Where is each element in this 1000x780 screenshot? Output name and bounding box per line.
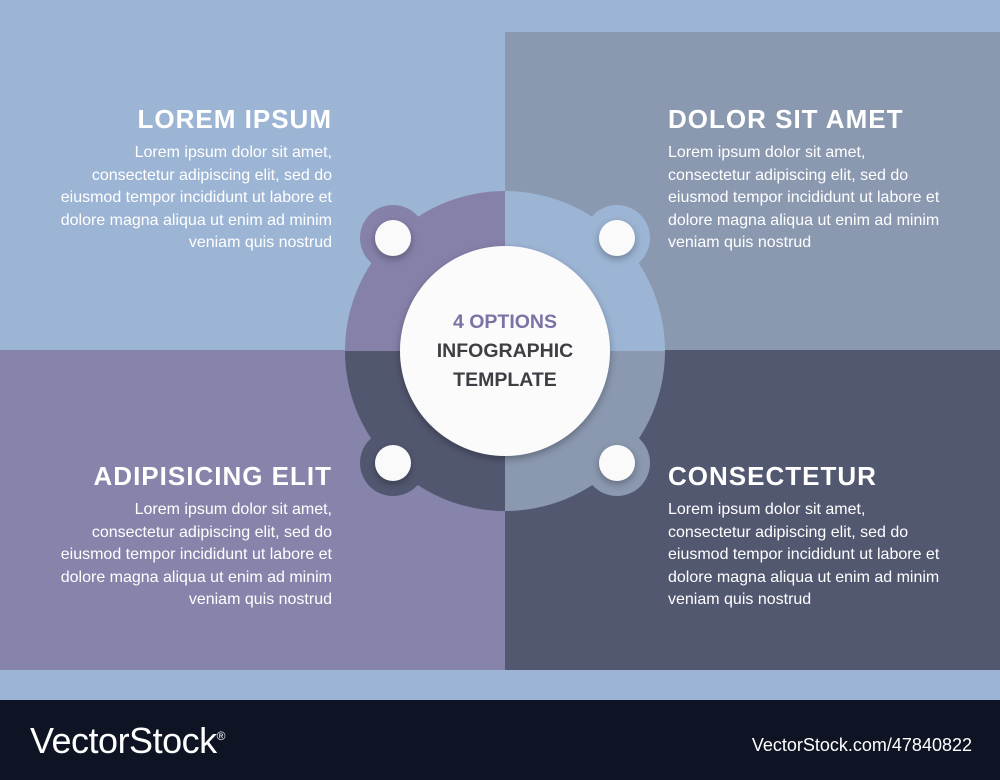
text: top-right: veniam quis nostrud [668, 234, 811, 251]
text: top-right: DOLOR SIT AMET [668, 104, 903, 134]
text: top-left: consectetur adipiscing elit, sed do [92, 166, 332, 184]
text: top-left: eiusmod tempor incididunt ut labore et [61, 189, 332, 206]
center circle: 4 OPTIONS [453, 311, 557, 333]
footer: VectorStock® [30, 720, 225, 761]
icon: dots [375, 220, 635, 481]
center circle: INFOGRAPHIC [437, 340, 573, 362]
footer [0, 700, 1000, 780]
text: top-left [61, 104, 332, 251]
text: bottom-left: Lorem ipsum dolor sit amet, [135, 501, 332, 518]
footer: VectorStock.com/47840822 [752, 735, 972, 755]
text: bottom-right: Lorem ipsum dolor sit amet, [668, 501, 865, 518]
panel: top-left [0, 0, 505, 350]
text: bottom-left: ADIPISICING ELIT [94, 461, 332, 491]
center circle [400, 246, 610, 456]
text: bottom-right: consectetur adipiscing elit, sed do [668, 524, 908, 540]
panel: top-right [505, 32, 1000, 350]
text: bottom-right: eiusmod tempor incididunt ut labore et [668, 546, 939, 563]
text: bottom-left: dolore magna aliqua ut enim ad minim [61, 568, 332, 586]
text: bottom-left: veniam quis nostrud [189, 591, 332, 608]
text: top-right: Lorem ipsum dolor sit amet, [668, 144, 865, 161]
text: top-left: Lorem ipsum dolor sit amet, [135, 144, 332, 161]
text: bottom-left: consectetur adipiscing elit, sed do [92, 524, 332, 540]
text: top-right: eiusmod tempor incididunt ut labore et [668, 189, 939, 206]
text: top-left: veniam quis nostrud [189, 234, 332, 251]
panel: bottom-left [0, 350, 505, 670]
text: bottom-left: eiusmod tempor incididunt ut labore et [61, 546, 332, 563]
text: top-right: dolore magna aliqua ut enim ad minim [668, 212, 939, 228]
text: top-right [668, 104, 940, 251]
text: top-left: dolore magna aliqua ut enim ad minim [61, 212, 332, 228]
text: bottom-left [61, 461, 332, 608]
panel: bottom-right [505, 350, 1000, 670]
text: bottom-right: veniam quis nostrud [668, 591, 811, 608]
text: top-right: consectetur adipiscing elit, sed do [668, 166, 908, 184]
center circle: TEMPLATE [453, 369, 557, 391]
text: top-left: LOREM IPSUM [138, 104, 332, 134]
text: bottom-right [668, 461, 940, 608]
text: bottom-right: dolore magna aliqua ut enim ad minim [668, 568, 939, 586]
text: bottom-right: CONSECTETUR [668, 461, 877, 491]
